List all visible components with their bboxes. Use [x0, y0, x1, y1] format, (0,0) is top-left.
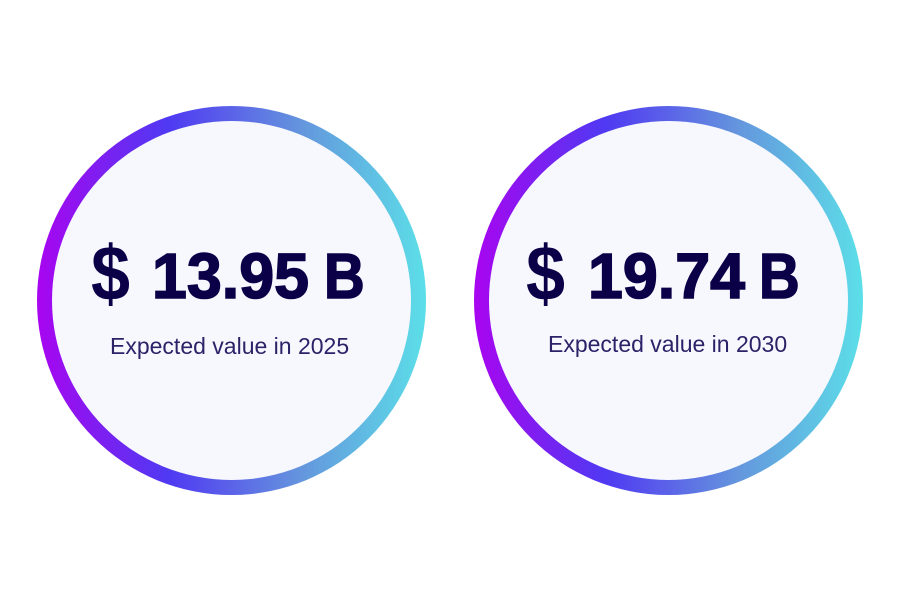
value: 13.95 B: [91, 229, 365, 317]
circle interior 2025: [52, 120, 411, 480]
panel: 2030 value circle: [474, 106, 863, 494]
value: 13.95 B: B: [324, 240, 365, 312]
caption: expected value in 2025: Expected value in 2025: [110, 333, 349, 359]
panel: 2025 value circle: [37, 106, 426, 494]
circle interior 2030: [489, 120, 848, 480]
value: 13.95 B: $: [91, 229, 130, 317]
value: 19.74 B: $: [526, 229, 565, 317]
value: 13.95 B: 13.95: [152, 240, 308, 312]
value: 19.74 B: B: [759, 240, 800, 312]
value: 19.74 B: 19.74: [588, 240, 745, 312]
caption: expected value in 2030: Expected value in 2030: [548, 331, 787, 357]
value: 19.74 B: [526, 229, 800, 317]
